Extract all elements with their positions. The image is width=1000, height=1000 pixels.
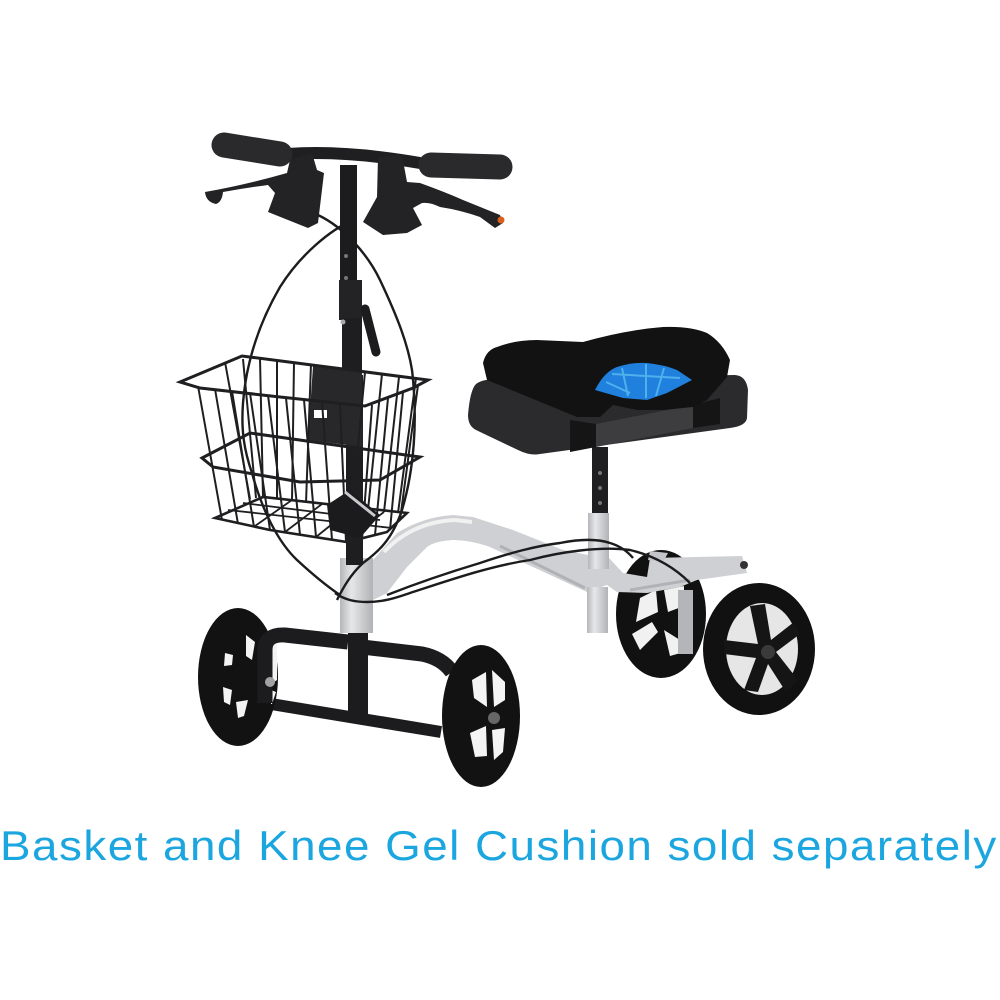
cushion post [588, 447, 609, 569]
brake levers [205, 153, 504, 235]
steering column [339, 165, 376, 565]
rear near wheel [703, 583, 815, 715]
caption: Basket and Knee Gel Cushion sold separately [0, 822, 998, 869]
front left wheel [198, 608, 348, 746]
knee cushion base [468, 375, 748, 454]
rear far wheel [616, 550, 706, 678]
brake cable loop [242, 215, 690, 602]
basket mounting plate [308, 366, 363, 447]
brake mount under basket [327, 490, 380, 538]
handlebar with grips [224, 145, 500, 167]
black gel cushion cover [483, 327, 730, 417]
blue gel insert [595, 363, 692, 400]
silver main frame [340, 515, 748, 654]
wire basket [180, 356, 428, 542]
front crossbar frame [265, 633, 452, 732]
front right wheel [442, 645, 520, 787]
